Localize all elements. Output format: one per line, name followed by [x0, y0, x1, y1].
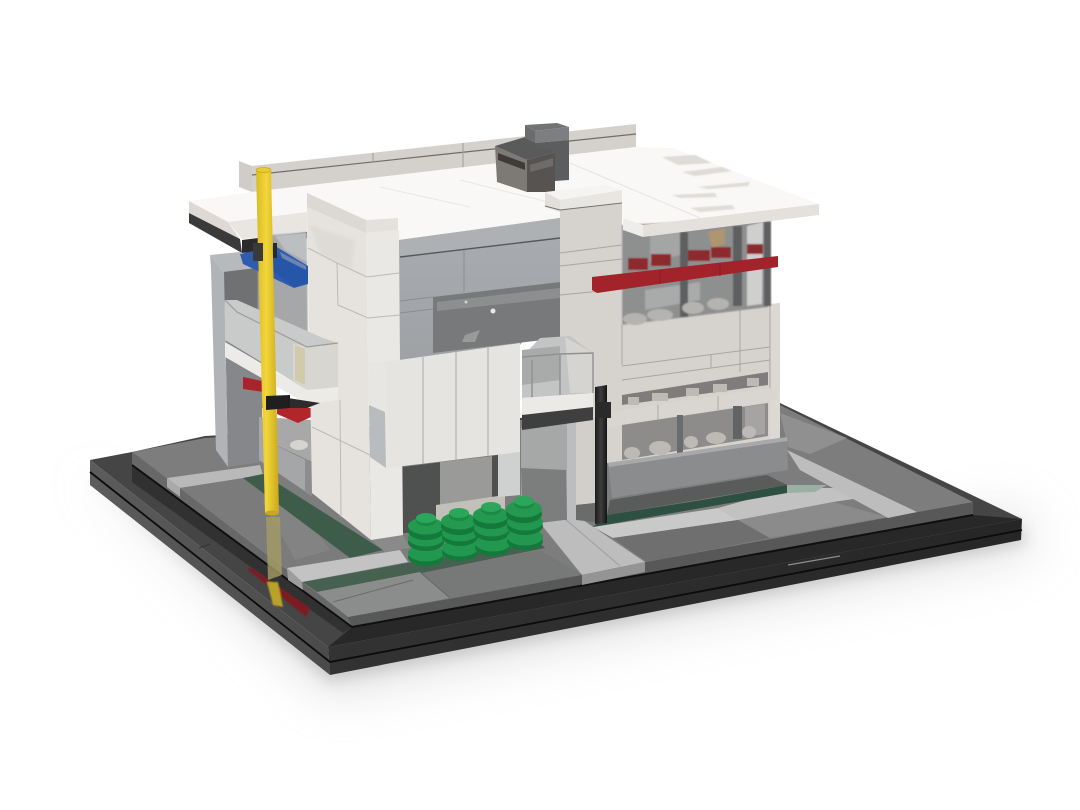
left lower window and planter [259, 417, 312, 496]
pavement: left light strip [167, 465, 263, 488]
right planter [608, 437, 788, 498]
black pole brackets [253, 243, 290, 410]
stack 4 [506, 496, 543, 550]
pavement: right slab one [613, 520, 770, 562]
pavement: right diagonal light strip [787, 450, 917, 518]
left grey column [210, 252, 262, 467]
lower window [622, 403, 768, 460]
pavement: right green strip [593, 485, 787, 527]
roof: left wing [189, 201, 307, 253]
red beam right [592, 256, 778, 293]
ledge [608, 387, 777, 427]
base plate: black layered baseplate [90, 403, 1022, 675]
upper window strip [622, 372, 768, 405]
left upper window behind pole [258, 232, 308, 346]
roof right front edge [623, 218, 643, 237]
pavement: reflective strip [718, 488, 860, 520]
rear parapet wall [239, 124, 636, 192]
lower entry glass [521, 418, 595, 522]
reflection: red and yellow on base [247, 568, 310, 617]
pavement: middle light slab [540, 518, 645, 575]
stack 2 [441, 508, 478, 561]
blue beam [240, 246, 308, 288]
roof reflections [662, 155, 750, 212]
pavement: left grey slab [180, 475, 350, 568]
smoked glass box [495, 137, 555, 192]
lower right windows [608, 372, 777, 460]
stack 1 [408, 513, 444, 566]
grey plate with pavements [132, 405, 973, 627]
yellow pole [256, 168, 279, 516]
right balcony [522, 336, 593, 430]
balcony slab [522, 393, 593, 417]
pavement: ground before tower [371, 535, 410, 552]
central window [433, 282, 560, 353]
grey recessed wall [399, 218, 560, 360]
roof: white top surface [189, 147, 819, 240]
column lip [545, 185, 622, 200]
left balcony [225, 300, 338, 408]
pavement: dark area before planter [607, 475, 787, 515]
chimney [525, 123, 569, 181]
right column and wall [545, 185, 780, 470]
pavement: front green strip [303, 543, 545, 592]
entry under front panel [403, 450, 520, 533]
pavement: left green strip [243, 474, 383, 558]
black post [595, 385, 611, 524]
pavement: right slab two [738, 502, 887, 538]
reflection: yellow pole in plate [266, 517, 282, 580]
white front panel [368, 343, 520, 468]
balcony slab [225, 342, 338, 404]
pavement: front light strip [287, 550, 408, 582]
green stud stacks [408, 496, 543, 566]
pavement: right corner slab [810, 446, 973, 512]
ground shadow [75, 470, 1040, 695]
stack 3 [473, 502, 511, 556]
lip of tower [307, 193, 366, 233]
front tower [307, 193, 403, 540]
pavement: right white strip [593, 508, 738, 538]
red beams left [243, 377, 311, 423]
upper right windows [622, 204, 819, 325]
pavement: front grey slab [317, 550, 582, 617]
